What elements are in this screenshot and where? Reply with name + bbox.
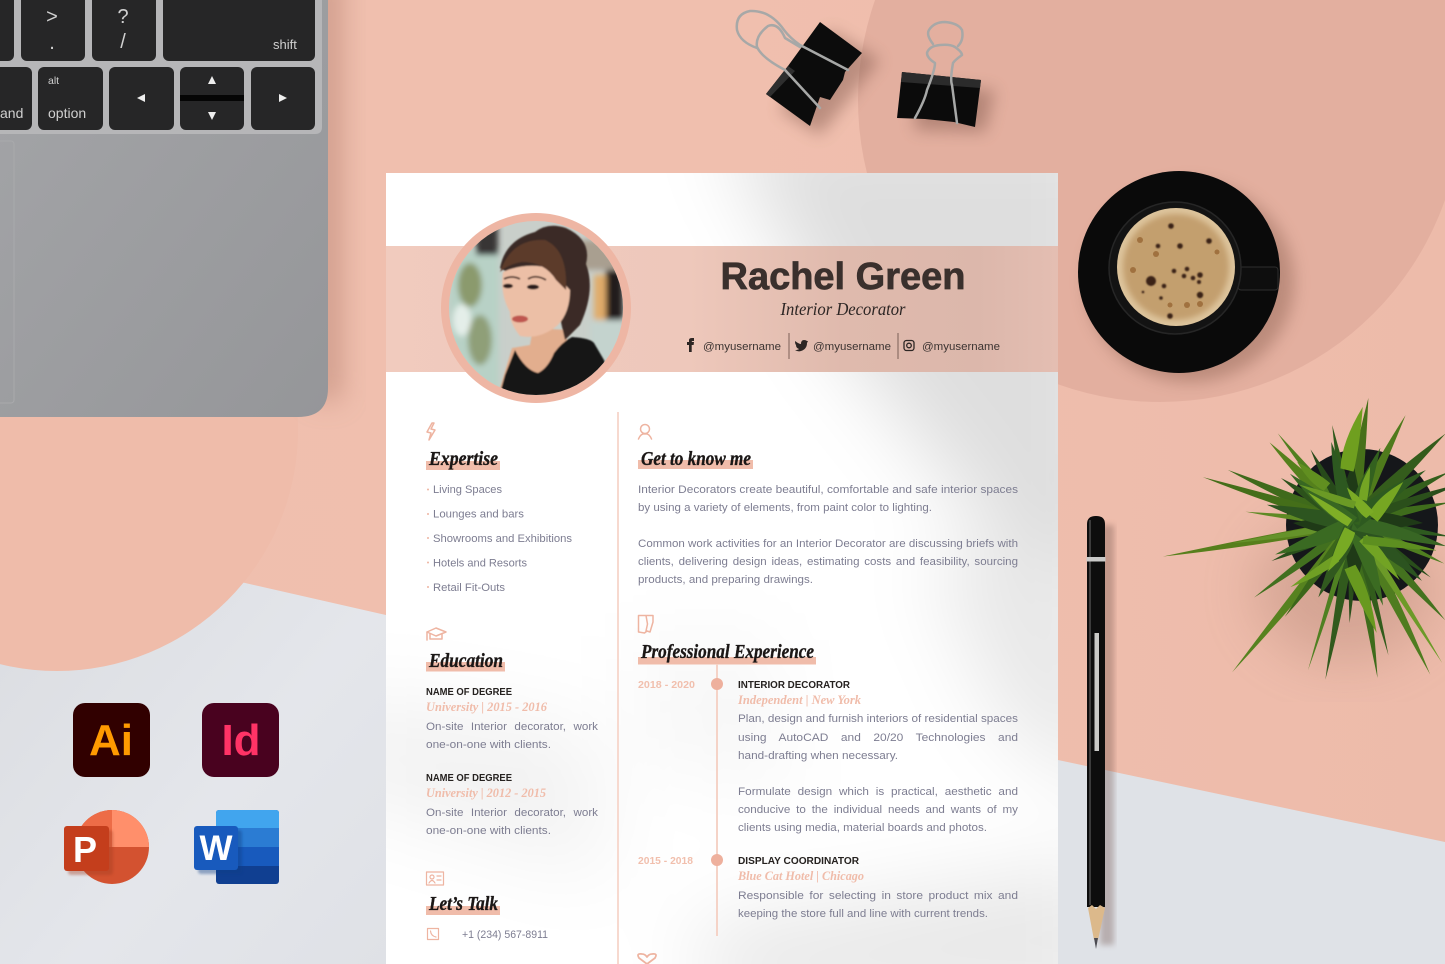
outer leaves bbox=[1162, 397, 1445, 681]
degree one: NAME OF DEGREE bbox=[426, 686, 512, 698]
job two: keeping the store full and line with current trends. bbox=[738, 908, 988, 920]
skills list bbox=[427, 484, 572, 594]
job one: 2018 - 2020 bbox=[638, 679, 695, 691]
degree one: University | 2015 - 2016 bbox=[426, 699, 547, 714]
black top bbox=[500, 336, 606, 395]
job two: Blue Cat Hotel | Chicago bbox=[737, 868, 864, 883]
icon: open book bbox=[638, 616, 653, 633]
plant shadow bbox=[1255, 520, 1435, 660]
icon: heart bbox=[638, 954, 656, 964]
name: Rachel Green bbox=[720, 256, 966, 298]
degree one bbox=[426, 686, 599, 751]
skills list: Hotels and Resorts bbox=[433, 558, 527, 570]
pencil tip bbox=[1088, 905, 1105, 940]
face bbox=[502, 266, 570, 337]
keyboard keys bbox=[0, 0, 315, 130]
lips bbox=[512, 316, 528, 322]
key labels: option bbox=[48, 105, 86, 121]
icon: Word: W bbox=[199, 829, 233, 868]
heading: professional experience: Professional Experience bbox=[640, 641, 814, 663]
cup handle bbox=[1238, 267, 1278, 290]
panel: professional experience bbox=[638, 616, 1019, 936]
skills list: Showrooms and Exhibitions bbox=[433, 533, 572, 545]
social handles: @myusername bbox=[813, 341, 891, 353]
job one: using AutoCAD and 20/20 Technologies and bbox=[738, 732, 1018, 744]
panel: expertise bbox=[426, 423, 572, 594]
skills list: Lounges and bars bbox=[433, 508, 525, 520]
coffee cup on saucer bbox=[1078, 171, 1294, 382]
coffee surface bbox=[1117, 208, 1235, 326]
social handles: @myusername bbox=[703, 341, 781, 353]
job one: conducive to the individual needs and wants of my bbox=[738, 804, 1019, 816]
job two: Responsible for selecting in store product mix and bbox=[738, 890, 1018, 902]
fringe bbox=[500, 240, 566, 290]
job one: INTERIOR DECORATOR bbox=[738, 679, 850, 691]
potted plant bbox=[1162, 397, 1445, 681]
key labels: > bbox=[46, 6, 58, 28]
heading: education: Education bbox=[428, 650, 503, 672]
binder clip right bbox=[897, 22, 995, 132]
about text: Interior Decorators create beautiful, comfortable and safe interior spaces bbox=[638, 484, 1019, 496]
degree two: On-site Interior decorator, work bbox=[426, 807, 599, 819]
icon: graduation cap bbox=[427, 628, 446, 640]
social handles bbox=[687, 333, 1000, 359]
icon: twitter bbox=[795, 340, 808, 351]
job two bbox=[638, 855, 1018, 920]
degree one: On-site Interior decorator, work bbox=[426, 721, 599, 733]
profile photo bbox=[441, 213, 631, 403]
brows and eyes bbox=[504, 277, 546, 280]
degree one: one-on-one with clients. bbox=[426, 739, 551, 751]
icon: Illustrator bbox=[73, 703, 150, 777]
job one bbox=[638, 679, 1019, 834]
icon: lightning bbox=[427, 423, 435, 440]
job title: Interior Decorator bbox=[780, 299, 906, 319]
degree two bbox=[426, 772, 599, 837]
icon: PowerPoint: P bbox=[73, 829, 97, 870]
pencil bbox=[1086, 516, 1114, 949]
hair back bbox=[500, 226, 590, 340]
icon: Illustrator: Ai bbox=[89, 716, 133, 765]
panel: get to know me bbox=[638, 424, 1019, 586]
phone number: +1 (234) 567-8911 bbox=[462, 929, 548, 941]
key labels: and bbox=[0, 105, 23, 121]
job two: DISPLAY COORDINATOR bbox=[738, 855, 859, 867]
key labels: / bbox=[120, 31, 126, 53]
job one: Independent | New York bbox=[737, 692, 861, 707]
icon: facebook bbox=[687, 338, 694, 352]
icon: InDesign bbox=[202, 703, 279, 777]
panel: resume page bbox=[386, 173, 1058, 964]
social handles: @myusername bbox=[922, 341, 1000, 353]
job one: Formulate design which is practical, aesthetic and bbox=[738, 786, 1018, 798]
application icons bbox=[64, 703, 279, 884]
icon: Word bbox=[194, 810, 279, 884]
photo ring bbox=[441, 213, 631, 403]
key labels: alt bbox=[48, 75, 59, 87]
icon: person bbox=[638, 424, 652, 439]
job one: clients using media, material boards and photos. bbox=[738, 822, 987, 834]
key labels: . bbox=[49, 32, 55, 54]
inner bright leaves bbox=[1288, 405, 1438, 635]
about text: clients, delivering design ideas, estimating costs and feasibility, sourcing bbox=[638, 556, 1018, 568]
skills list: Living Spaces bbox=[433, 484, 502, 496]
degree two: University | 2012 - 2015 bbox=[426, 785, 546, 800]
degree two: one-on-one with clients. bbox=[426, 825, 551, 837]
about text bbox=[638, 484, 1019, 586]
about text: Common work activities for an Interior Decorator are discussing briefs with bbox=[638, 538, 1018, 550]
key labels: ? bbox=[117, 6, 129, 28]
binder clip left bbox=[737, 11, 880, 135]
laptop shadow bbox=[314, 0, 340, 400]
panel: education bbox=[426, 628, 599, 837]
icon: instagram bbox=[904, 340, 914, 350]
job one: hand-drafting when necessary. bbox=[738, 750, 898, 762]
degree two: NAME OF DEGREE bbox=[426, 772, 512, 784]
about text: products, and preparing drawings. bbox=[638, 574, 813, 586]
laptop bbox=[0, 0, 328, 417]
background: pink circle left bbox=[0, 189, 298, 671]
background: grey wedge bottom right bbox=[1058, 760, 1445, 964]
heading: let's talk: Let’s Talk bbox=[428, 893, 498, 915]
key labels: shift bbox=[273, 37, 297, 52]
heading: get to know me: Get to know me bbox=[641, 448, 751, 470]
timeline bbox=[711, 664, 723, 936]
neck and chest bbox=[500, 328, 568, 388]
heading: expertise: Expertise bbox=[428, 448, 498, 470]
icon: PowerPoint bbox=[64, 810, 149, 884]
key labels bbox=[0, 6, 297, 121]
job one: Plan, design and furnish interiors of residential spaces bbox=[738, 713, 1019, 725]
page light and shadow overlay bbox=[386, 173, 1058, 964]
about text: by using a variety of elements, from paint color to lighting. bbox=[638, 502, 932, 514]
icon: contact card bbox=[426, 872, 444, 885]
background: large darker circle top right bbox=[858, 0, 1445, 402]
skills list: Retail Fit-Outs bbox=[433, 582, 506, 594]
header band bbox=[386, 246, 1058, 372]
plant pot bbox=[1286, 449, 1438, 601]
background: grey wedge bottom left bbox=[0, 500, 386, 964]
panel: contact bbox=[426, 872, 548, 941]
cup bbox=[1109, 202, 1241, 334]
job two: 2015 - 2018 bbox=[638, 855, 693, 867]
icon: InDesign: Id bbox=[221, 716, 261, 765]
saucer bbox=[1078, 171, 1280, 373]
